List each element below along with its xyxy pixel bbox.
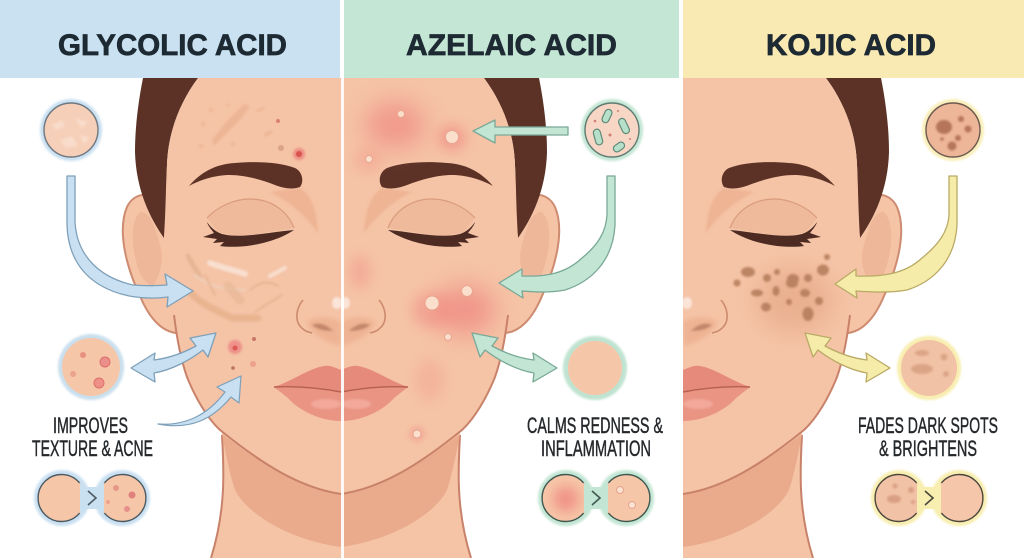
glycolic benefit label: TEXTURE & ACNE [32,436,153,461]
arrow: two-way to calm circle [472,333,557,382]
icon: before and after circles [871,470,987,526]
glycolic benefit label: IMPROVES [53,413,128,438]
icon: rough skin circle [40,99,102,161]
glycolic face illustration [123,78,342,558]
azelaic benefit label: INFLAMMATION [541,436,651,461]
forehead dry texture [199,104,273,148]
cheek rough texture [188,256,285,318]
glycolic heading: GLYCOLIC ACID [58,29,287,62]
arrow: text to acne [158,376,241,426]
icon: acne skin circle [58,334,124,400]
arrow: skin to cheek [67,176,193,307]
arrow: spots to cheek [835,176,957,298]
glycolic benefit label [32,413,153,461]
icon: bacteria circle [581,99,643,161]
icon: dark spots circle [922,99,984,161]
facial redness [350,101,495,442]
glycolic header band [0,0,340,78]
kojic heading: KOJIC ACID [766,29,936,62]
icon: fading spots circle [897,336,961,400]
cheek tan shading [757,268,833,332]
arrow: bacteria to forehead [473,120,568,143]
azelaic benefit label: CALMS REDNESS & [527,413,663,438]
kojic face illustration [682,78,901,558]
cheek acne [228,337,256,370]
azelaic header band [344,0,679,78]
panel: azelaic acid [340,0,679,558]
azelaic heading: AZELAIC ACID [406,29,617,62]
dark spots [734,254,830,321]
azelaic face illustration [340,78,559,558]
icon: before and after circles [538,470,654,526]
arrow: two-way to circle [131,333,216,382]
forehead blemishes [276,119,305,160]
panel: glycolic acid [0,0,342,558]
kojic benefit label: & BRIGHTENS [879,436,977,461]
panel: kojic acid [682,0,1024,558]
arrow: bacteria to cheek [499,176,615,298]
icon: before and after circles [34,470,150,526]
icon: calm skin circle [563,336,627,400]
kojic benefit label [858,413,998,461]
pimples [366,110,472,438]
arrow: two-way to fading circle [805,333,890,382]
azelaic benefit label [527,413,663,461]
kojic header band [683,0,1024,78]
